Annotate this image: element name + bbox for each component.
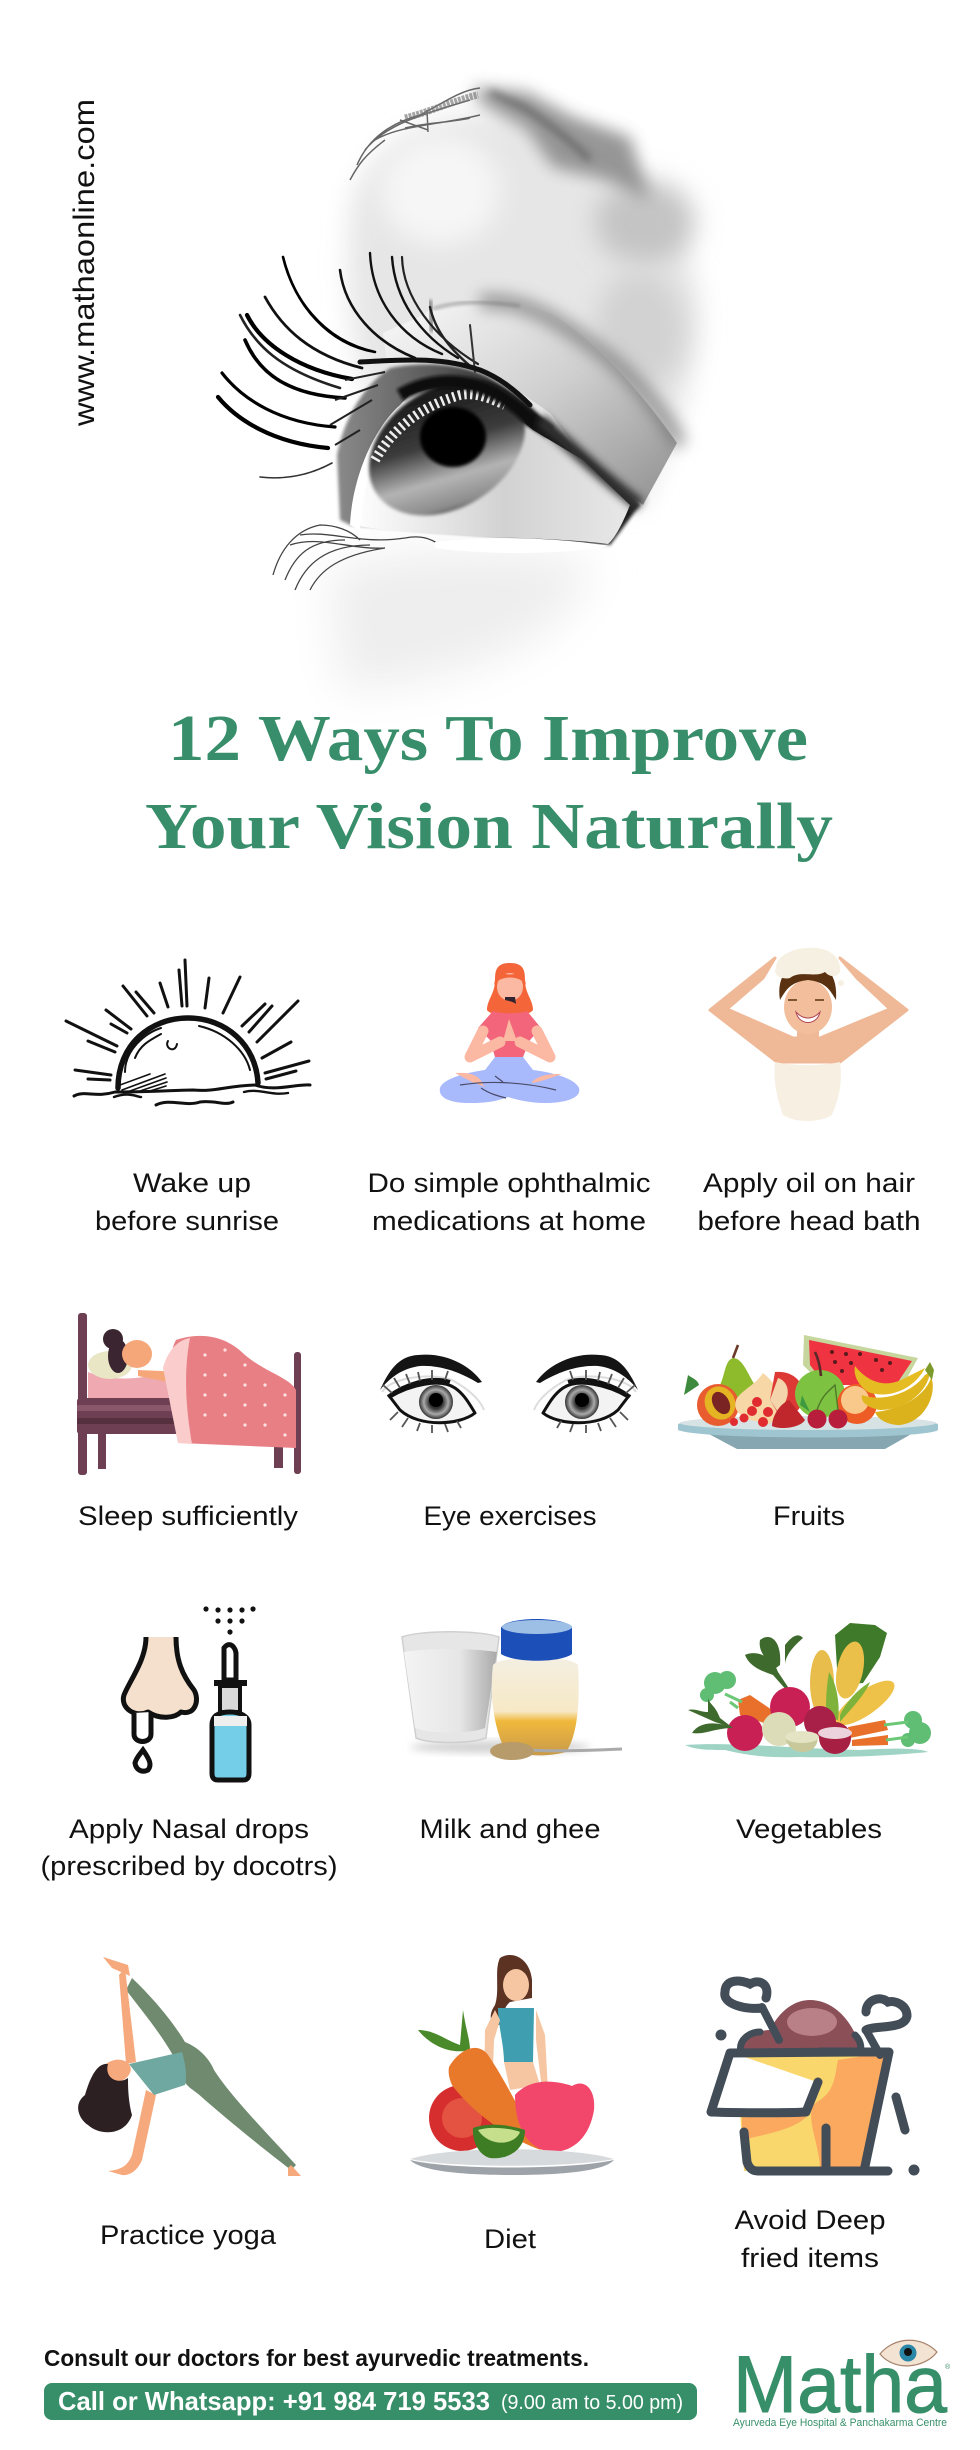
label: ophthalmic medications: medications at home bbox=[372, 1206, 646, 1236]
icon: eye exercises bbox=[380, 1355, 638, 1433]
title: 12 Ways To Improve bbox=[168, 702, 808, 775]
label: avoid deep fried bbox=[734, 2205, 886, 2273]
label: apply oil bbox=[698, 1168, 920, 1236]
logo: ® bbox=[945, 2363, 951, 2371]
title: Your Vision Naturally bbox=[145, 790, 833, 863]
label: practice yoga: Practice yoga bbox=[100, 2220, 277, 2250]
label: eye exercises: Eye exercises bbox=[424, 1501, 596, 1531]
label: ophthalmic medications bbox=[368, 1168, 650, 1236]
icon: meditating woman bbox=[440, 963, 579, 1103]
label: avoid deep fried: fried items bbox=[741, 2243, 879, 2273]
footer consult line: Consult our doctors for best ayurvedic treatments. bbox=[44, 2345, 589, 2371]
icon: sunrise bbox=[66, 960, 310, 1105]
label: nasal drops: (prescribed by docotrs) bbox=[40, 1851, 338, 1881]
logo eye icon bbox=[880, 2340, 937, 2366]
icon: yoga woman bbox=[78, 1957, 301, 2176]
label: nasal drops: Apply Nasal drops bbox=[69, 1814, 309, 1844]
call to action pill: Call or Whatsapp: +91 984 719 5533 bbox=[58, 2386, 490, 2416]
logo: Ayurveda Eye Hospital & Panchakarma Centre bbox=[733, 2417, 947, 2429]
website url: www.mathaonline.com bbox=[68, 99, 101, 427]
icon: fried chicken box bbox=[710, 1981, 920, 2176]
call to action pill bbox=[44, 2383, 697, 2420]
label: milk and ghee: Milk and ghee bbox=[420, 1814, 600, 1844]
label: wake up: Wake up bbox=[133, 1168, 251, 1198]
label: fruits: Fruits bbox=[773, 1501, 845, 1531]
label: apply oil: Apply oil on hair bbox=[703, 1168, 915, 1198]
icon: vegetables bbox=[685, 1623, 931, 1757]
hero eye photograph bbox=[218, 87, 700, 690]
label: ophthalmic medications: Do simple ophthalmic bbox=[368, 1168, 650, 1198]
icon: woman applying oil bbox=[710, 948, 907, 1121]
icon: diet bbox=[410, 1955, 614, 2175]
label: nasal drops bbox=[40, 1814, 338, 1881]
label: wake up: before sunrise bbox=[95, 1206, 279, 1236]
call to action pill: (9.00 am to 5.00 pm) bbox=[501, 2392, 683, 2414]
label: apply oil: before head bath bbox=[698, 1206, 920, 1236]
logo: Matha bbox=[733, 2340, 948, 2430]
label: diet: Diet bbox=[484, 2224, 537, 2254]
icon: nose and drops bbox=[123, 1606, 256, 1780]
icon: sleeping woman in bed bbox=[77, 1313, 301, 1475]
label: vegetables: Vegetables bbox=[736, 1814, 882, 1844]
label: sleep: Sleep sufficiently bbox=[78, 1501, 299, 1531]
title bbox=[145, 702, 833, 863]
icon: fruit plate bbox=[678, 1335, 938, 1449]
icon: milk and ghee bbox=[402, 1619, 622, 1760]
label: wake up bbox=[95, 1168, 279, 1236]
label: avoid deep fried: Avoid Deep bbox=[734, 2205, 886, 2235]
